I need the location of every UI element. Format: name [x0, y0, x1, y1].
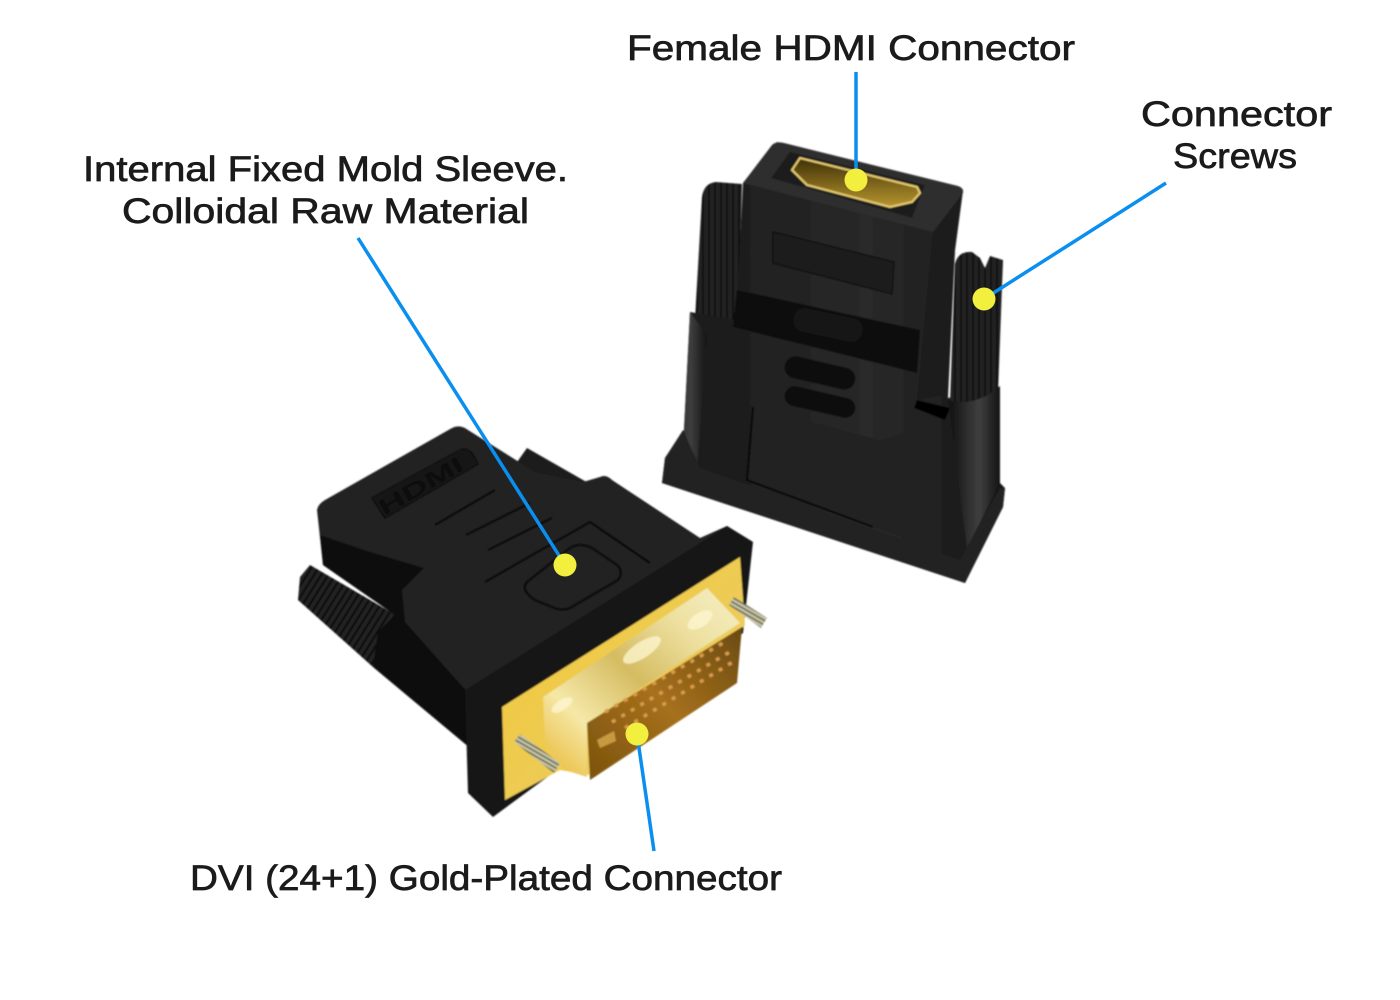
leader line: [854, 72, 858, 180]
side screw base: [373, 615, 480, 748]
label second line: Screws: [1173, 137, 1297, 176]
leader line: [637, 734, 654, 851]
flange base: [662, 430, 1005, 583]
front plate frame: [465, 526, 753, 817]
callout: internal fixed mold sleeve: [83, 150, 576, 576]
embossed stripes: [435, 490, 650, 582]
label: Connector: [1141, 95, 1332, 134]
label: Female HDMI Connector: [627, 29, 1075, 68]
icon: left connector screw: [695, 182, 742, 325]
embossed DVI logo: [525, 545, 621, 610]
gold base plate: [502, 557, 745, 800]
recessed panels on body: [733, 232, 950, 540]
callout: DVI gold-plated connector: [190, 722, 782, 898]
gold shell collar: [543, 588, 740, 777]
marker dot: [844, 168, 868, 192]
top face with HDMI port: [743, 142, 963, 232]
product: female HDMI end adapter (standing): [662, 142, 1005, 583]
side screw knurl: [298, 565, 408, 667]
port: gold HDMI socket: [792, 158, 920, 207]
gold shell interior with pins: [587, 627, 742, 780]
adapter body: [662, 142, 1005, 583]
label second line: Colloidal Raw Material: [122, 192, 529, 231]
body side faces: [917, 190, 963, 400]
callout: connector screws: [972, 95, 1332, 310]
icon: right connector screw: [950, 252, 1003, 403]
leader line: [984, 183, 1166, 299]
label: DVI (24+1) Gold-Plated Connector: [190, 859, 782, 898]
embossed HDMI logo: HDMI: [374, 452, 468, 520]
label: Internal Fixed Mold Sleeve.: [83, 150, 568, 189]
product: DVI end adapter (lying): [298, 426, 767, 817]
threaded screw far: [729, 597, 767, 628]
collar highlights: [549, 607, 716, 716]
marker dot: [626, 722, 648, 746]
rear screw tab: [515, 448, 590, 495]
threaded screw near: [514, 734, 560, 773]
embossed HDMI logo: [372, 449, 478, 520]
shaded shoulder: [320, 535, 424, 622]
marker dot: [972, 288, 996, 310]
leader line: [358, 238, 565, 565]
callout: female HDMI connector: [627, 29, 1075, 192]
adapter body top: [317, 426, 753, 695]
marker dot: [554, 554, 576, 576]
